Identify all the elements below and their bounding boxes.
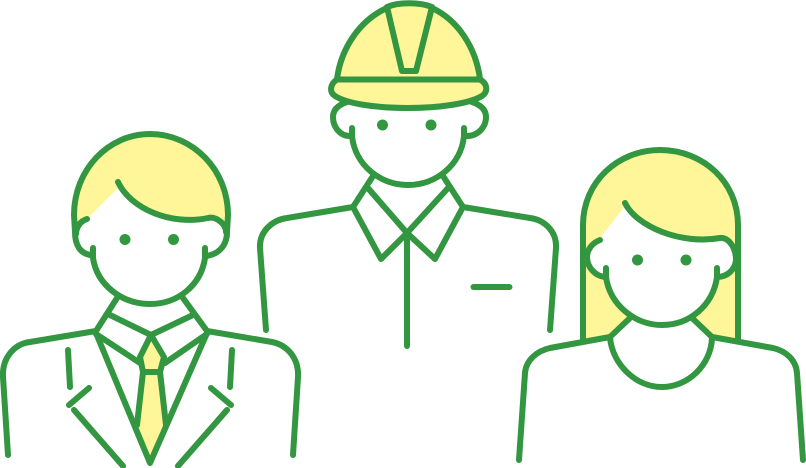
figure: businessman in suit [3,134,298,466]
ears [333,102,486,136]
bangs and right ear [118,182,226,232]
helmet brim [331,80,486,108]
neck and collar [96,298,207,363]
bangs and right ear [625,203,736,277]
head outline [74,134,228,256]
pocket [474,284,510,290]
eyes [632,254,692,266]
shoulders and arms [260,207,556,330]
jacket lapels [96,333,207,463]
face [606,268,717,325]
helmet dome [331,4,486,108]
helmet ridge [387,3,432,71]
shoulders and arms [519,337,803,460]
hair outline [583,150,738,340]
jacket details [68,350,232,466]
face [93,248,205,304]
tie outline [137,335,166,425]
eyes [377,120,436,130]
figure: woman with long hair [519,150,803,460]
helmet [331,3,486,108]
eyes [120,234,179,245]
hair [75,134,226,228]
left ear [76,219,87,234]
tie [137,338,166,458]
neck [610,318,712,337]
shoulders and arms [3,331,298,455]
neckline [610,338,712,387]
shirt placket [404,233,410,346]
collar [353,176,463,259]
hair [583,150,738,343]
figure: construction worker with helmet [260,3,556,346]
left ear [587,240,605,277]
face [352,128,464,185]
face and neck fill [587,206,736,387]
